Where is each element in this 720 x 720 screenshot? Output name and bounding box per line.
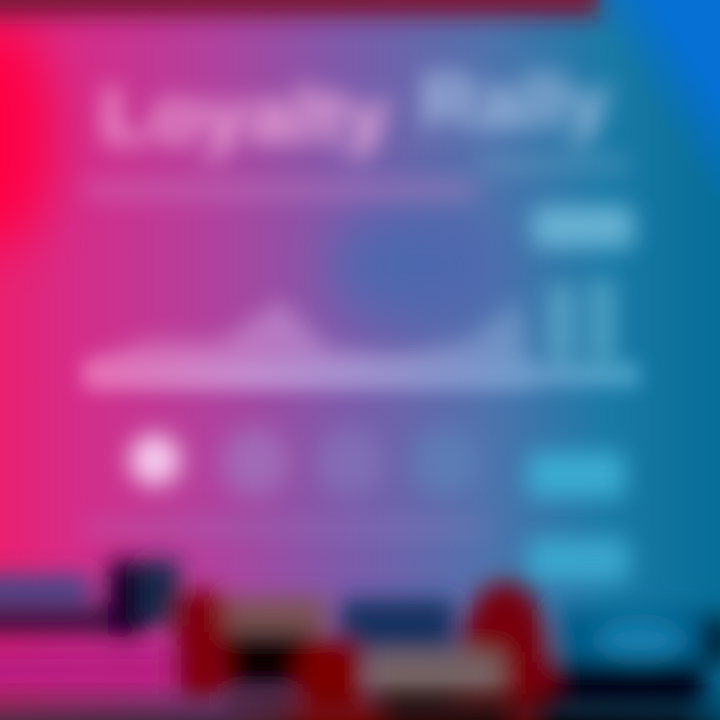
- top stat callout: [532, 206, 634, 248]
- background glow: central blue: [335, 210, 505, 320]
- background glow: left red: [0, 20, 50, 250]
- red dumbbell right: [456, 582, 556, 715]
- icon: highlighted circle: [129, 434, 181, 486]
- bar chart: [548, 280, 614, 365]
- weight navy side: [142, 560, 180, 626]
- right dark base: [550, 662, 705, 708]
- left blue strip: [0, 576, 90, 602]
- top dark band: [0, 0, 600, 16]
- area chart: [85, 300, 535, 385]
- dark blue mid shelf: [340, 600, 455, 650]
- title: Loyalty: [100, 71, 390, 159]
- dumbbell handle left: [226, 598, 326, 632]
- icon: circle 2: [221, 428, 289, 496]
- icon: circle 4: [411, 428, 479, 496]
- icon: circle 3: [316, 428, 384, 496]
- magenta mat: [0, 648, 170, 694]
- lower purple patch: [225, 692, 295, 720]
- red dumbbell centre: [298, 638, 364, 720]
- title: [100, 57, 610, 159]
- teal highlight: [596, 622, 684, 658]
- bottom foreground: [0, 560, 720, 720]
- dumbbell handle centre: [368, 652, 502, 694]
- dark right weight: [702, 612, 720, 668]
- chart axis band: [85, 362, 640, 388]
- top right blue wedge: [600, 0, 720, 200]
- right teal base: [555, 610, 720, 665]
- dark gap between dumbbells: [225, 632, 315, 688]
- dark under handle: [375, 690, 555, 720]
- red dumbbell left: [174, 590, 228, 702]
- left dark maroon band: [0, 606, 120, 636]
- caption line: [85, 520, 485, 536]
- subtitle: [85, 158, 630, 198]
- stat block: lower: [527, 538, 629, 582]
- row of icons: [129, 428, 479, 496]
- title: Rally: [420, 57, 610, 145]
- weight shadow side: [108, 560, 146, 640]
- stat block: upper: [527, 452, 625, 498]
- bottom edge strip: [0, 680, 720, 720]
- blurred bottom objects: [0, 560, 720, 720]
